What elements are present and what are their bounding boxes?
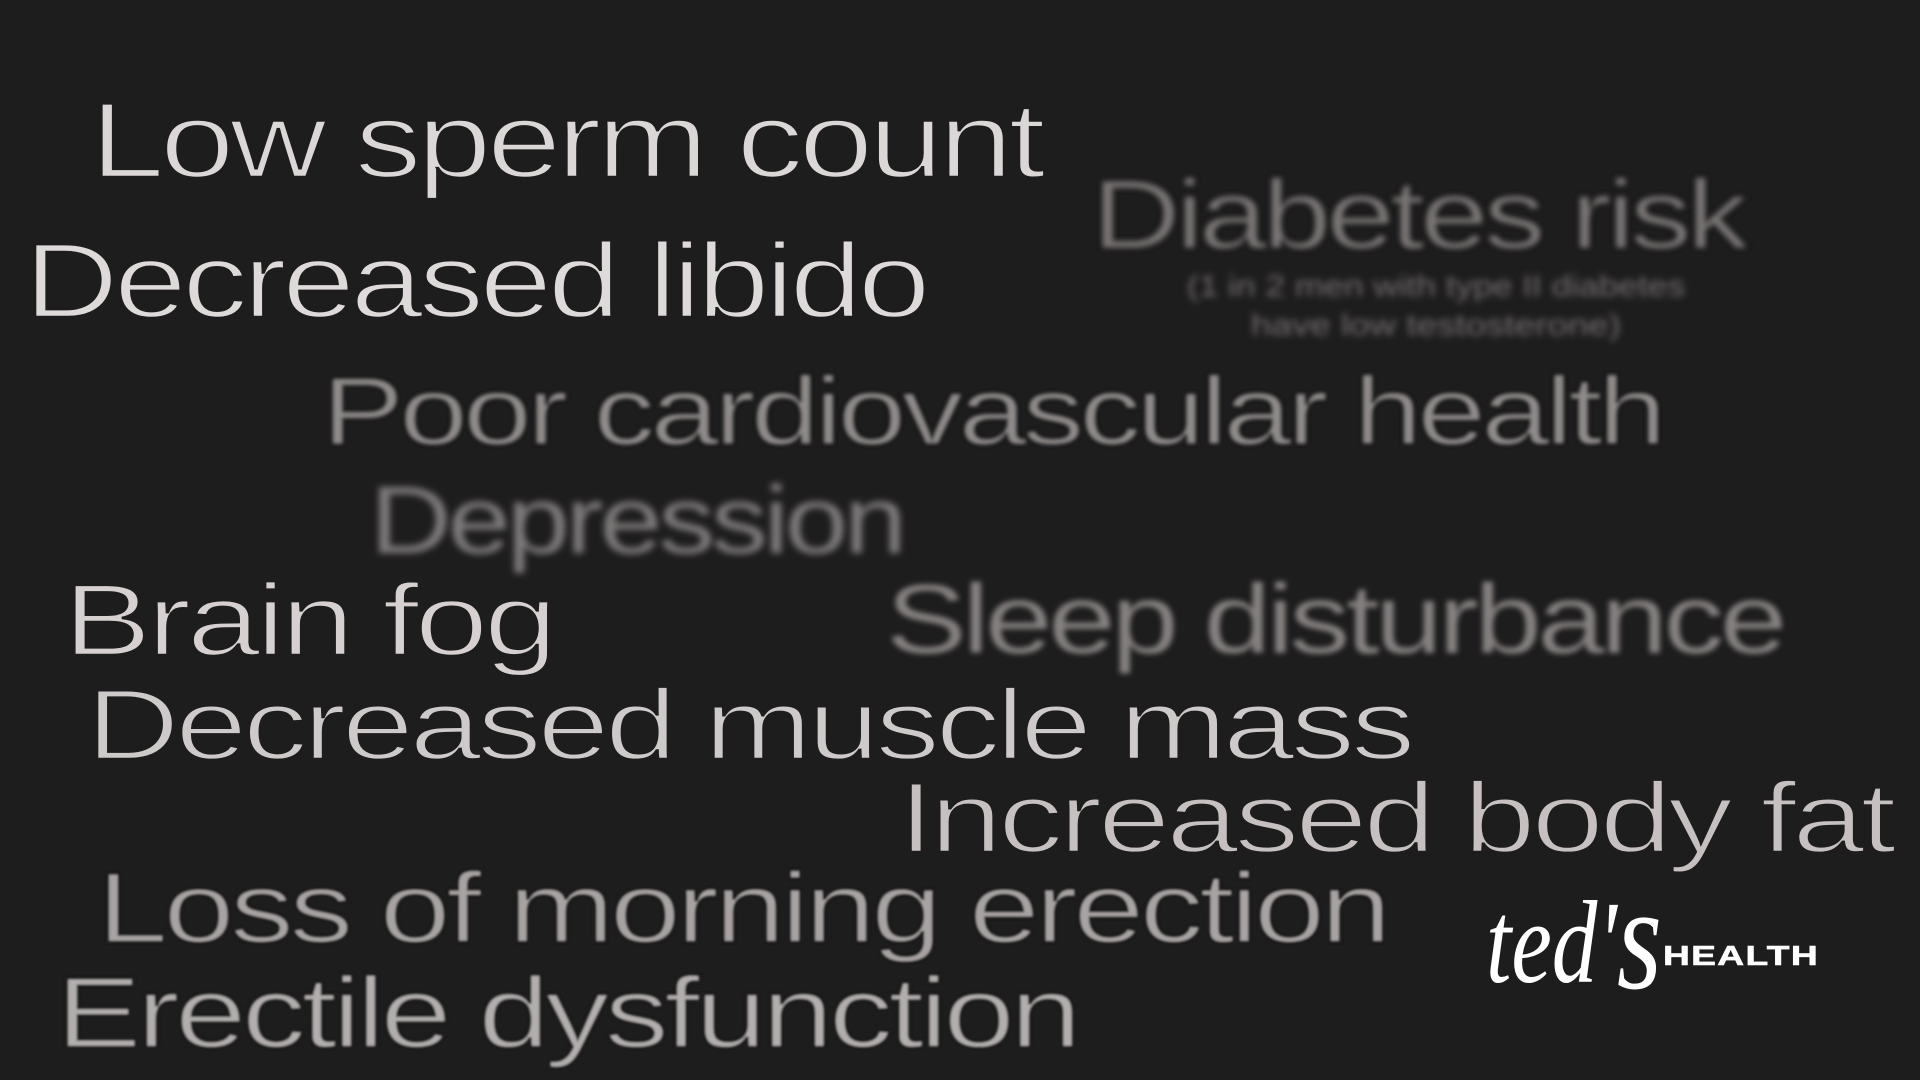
symptom: sleep disturbance: Sleep disturbance (886, 564, 1783, 674)
symptom: erectile dysfunction: Erectile dysfunction (56, 957, 1077, 1069)
diabetes risk footnote: (1 in 2 men with type II diabetes (1187, 270, 1685, 303)
diabetes risk footnote (1187, 270, 1685, 342)
logo: ted's health: s (1617, 855, 1662, 1021)
symptom: increased body fat: Increased body fat (898, 762, 1897, 874)
symptom: depression: Depression (370, 467, 903, 574)
symptom: decreased muscle mass: Decreased muscle mass (86, 669, 1412, 781)
symptom: decreased libido: Decreased libido (24, 222, 926, 340)
symptom: low sperm count: Low sperm count (90, 80, 1045, 200)
symptom: loss of morning erection: Loss of morning erection (97, 852, 1387, 963)
symptom: brain fog: Brain fog (63, 563, 553, 677)
logo: ted's health: ted' (1486, 877, 1655, 1008)
diabetes risk footnote: have low testosterone) (1251, 309, 1621, 342)
symptom: diabetes risk: Diabetes risk (1092, 160, 1749, 269)
symptom: poor cardiovascular health: Poor cardiovascular health (322, 358, 1662, 465)
logo: ted's health (1486, 855, 1819, 1021)
logo: ted's health: HEALTH (1663, 940, 1819, 971)
